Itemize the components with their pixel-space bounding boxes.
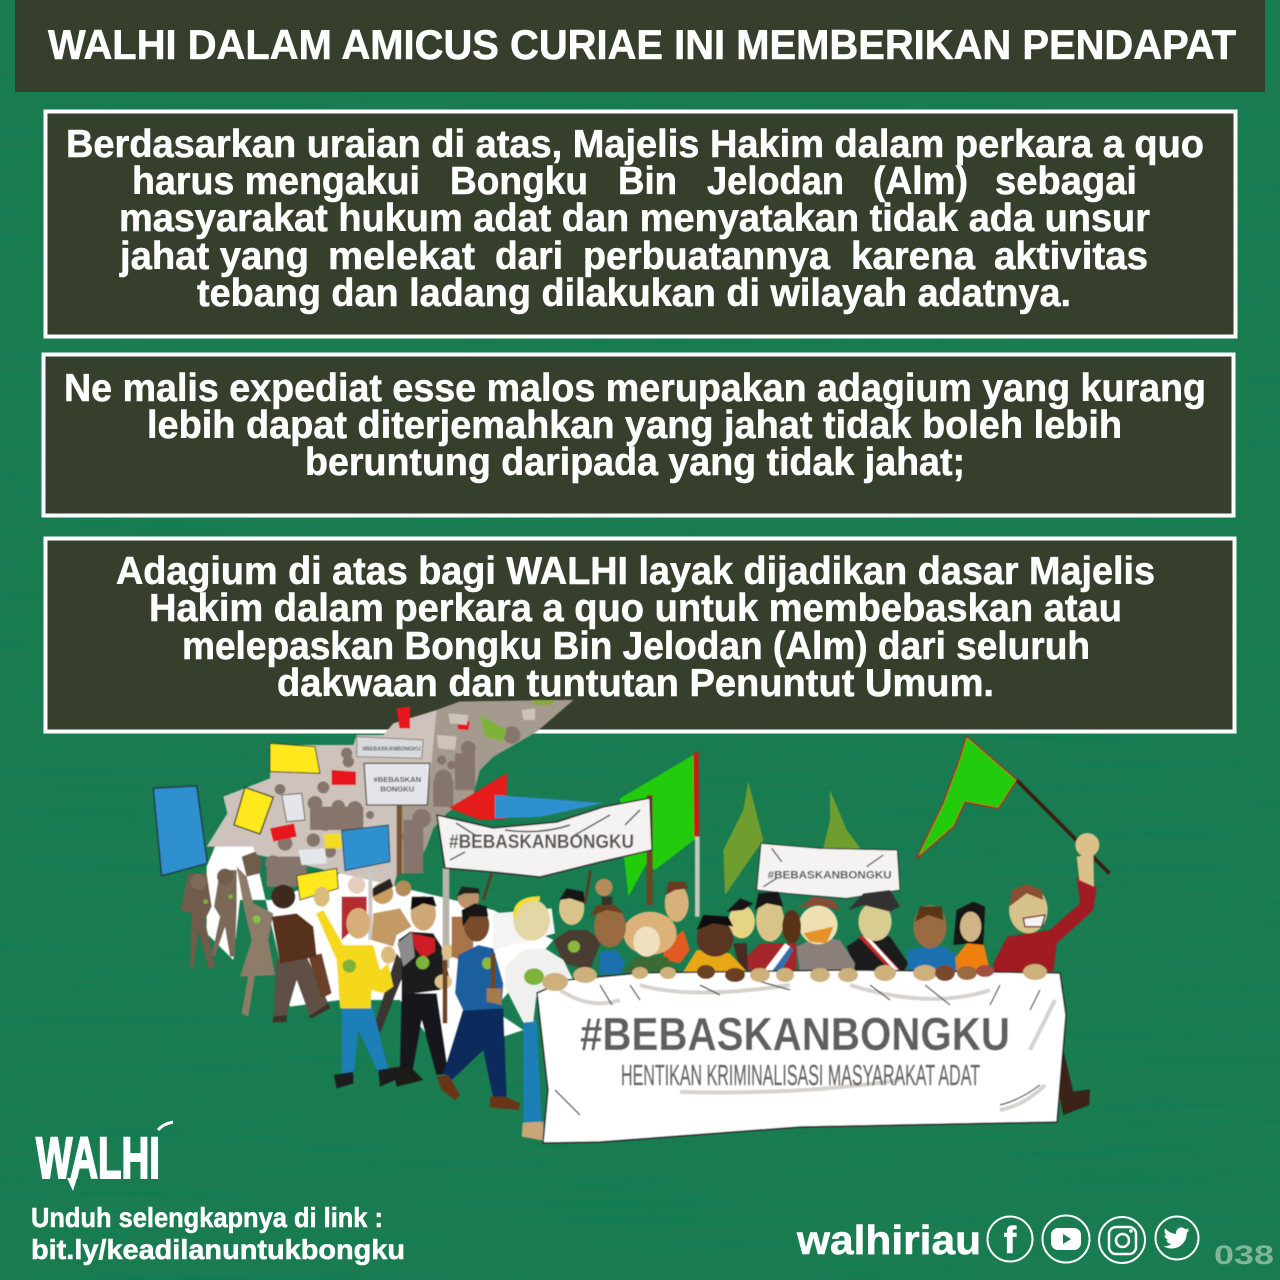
panel: first statement: harus mengakui (132, 160, 420, 203)
panel: first statement: sebagai (995, 160, 1137, 203)
panel: first statement: Bin (618, 160, 677, 203)
panel: adage explanation (44, 354, 1234, 516)
panel: first statement: (Alm) (873, 160, 968, 203)
flag: bright green (620, 752, 700, 917)
right crowd, flags and banner (590, 737, 1109, 1115)
illustration: protest march (153, 700, 1109, 1143)
left crowd and placards (153, 700, 613, 1141)
marchers behind the main banner (590, 833, 1099, 975)
panel: first statement: tebang dan ladang dilakukan di wilayah adatnya. (197, 272, 1071, 315)
hands gripping main banner (542, 964, 1047, 991)
small banner (757, 843, 900, 898)
panel: first statement: Jelodan (707, 160, 844, 203)
placards: BONGKU (380, 785, 415, 794)
panel: first statement: Bongku (450, 160, 588, 203)
woman in dress (237, 852, 275, 1017)
panel: adage explanation: Ne malis expediat esse malos merupakan adagium yang kurang (64, 367, 1206, 410)
panel: conclusion: Adagium di atas bagi WALHI layak dijadikan dasar Majelis (116, 550, 1155, 593)
panel: first statement: perbuatannya (583, 235, 830, 278)
icon: twitter (1156, 1216, 1198, 1260)
panel: first statement: aktivitas (994, 235, 1148, 278)
man with red scarf (393, 868, 455, 1087)
panel: first statement: masyarakat hukum adat dan menyatakan tidak ada unsur (119, 197, 1150, 240)
panel: conclusion: dakwaan dan tuntutan Penuntut Umum. (277, 662, 994, 705)
panel: first statement (46, 112, 1236, 336)
icon: facebook (988, 1216, 1032, 1262)
panel: first statement: melekat (328, 235, 475, 278)
icon: youtube (1042, 1216, 1090, 1262)
dark man behind banner (483, 870, 613, 970)
flag: raised by man in red (917, 737, 1109, 873)
placards: #BEBASKANBONGKU (362, 747, 421, 753)
download link text: Unduh selengkapnya di link : (31, 1202, 383, 1233)
panel: adage explanation: lebih dapat diterjemahkan yang jahat tidak boleh lebih (147, 404, 1122, 447)
main banner (537, 970, 1066, 1143)
panel: conclusion (46, 538, 1234, 732)
banner: top hashtag: #BEBASKANBONGKU (449, 832, 634, 853)
panel: conclusion: melepaskan Bongku Bin Jelodan (Alm) dari seluruh (182, 625, 1090, 668)
small banner: #BEBASKANBONGKU (768, 869, 892, 881)
back soldiers (181, 869, 237, 968)
logo: WALHI: WALHI (36, 1126, 160, 1191)
trailing leg (1058, 1037, 1090, 1115)
title bar (15, 0, 1265, 92)
download link text (31, 1202, 405, 1265)
page number: 038 (1214, 1240, 1274, 1270)
banner heading: #BEBASKANBONGKU (580, 1008, 1010, 1060)
panel: first statement: Berdasarkan uraian di atas, Majelis Hakim dalam perkara a quo (66, 123, 1204, 166)
man with khaki shirt behind (342, 876, 412, 1033)
panel: conclusion: Hakim dalam perkara a quo untuk membebaskan atau (149, 587, 1122, 630)
man in brown jacket (271, 885, 332, 1023)
social handle: walhiriau (796, 1217, 981, 1263)
panel: adage explanation: beruntung daripada yang tidak jahat; (305, 441, 965, 484)
panel: first statement: karena (851, 235, 975, 278)
placards: #BEBASKAN (374, 775, 422, 784)
download link text: bit.ly/keadilanuntukbongku (31, 1234, 405, 1265)
man in white sweater (505, 898, 573, 1141)
man in blue sweater (437, 903, 520, 1110)
title bar: WALHI DALAM AMICUS CURIAE INI MEMBERIKAN PENDAPAT (48, 21, 1236, 68)
man in yellow jacket (314, 887, 403, 1088)
flags: olive (723, 782, 862, 895)
icon: facebook: f (1004, 1220, 1017, 1262)
man with backpack behind (452, 887, 555, 960)
banner subheading: HENTIKAN KRIMINALISASI MASYARAKAT ADAT (621, 1060, 980, 1092)
banner: top hashtag (437, 773, 652, 877)
placards (153, 700, 555, 940)
icon: instagram (1099, 1217, 1145, 1263)
panel: first statement: jahat yang (119, 235, 309, 278)
panel: first statement: dari (495, 235, 563, 278)
